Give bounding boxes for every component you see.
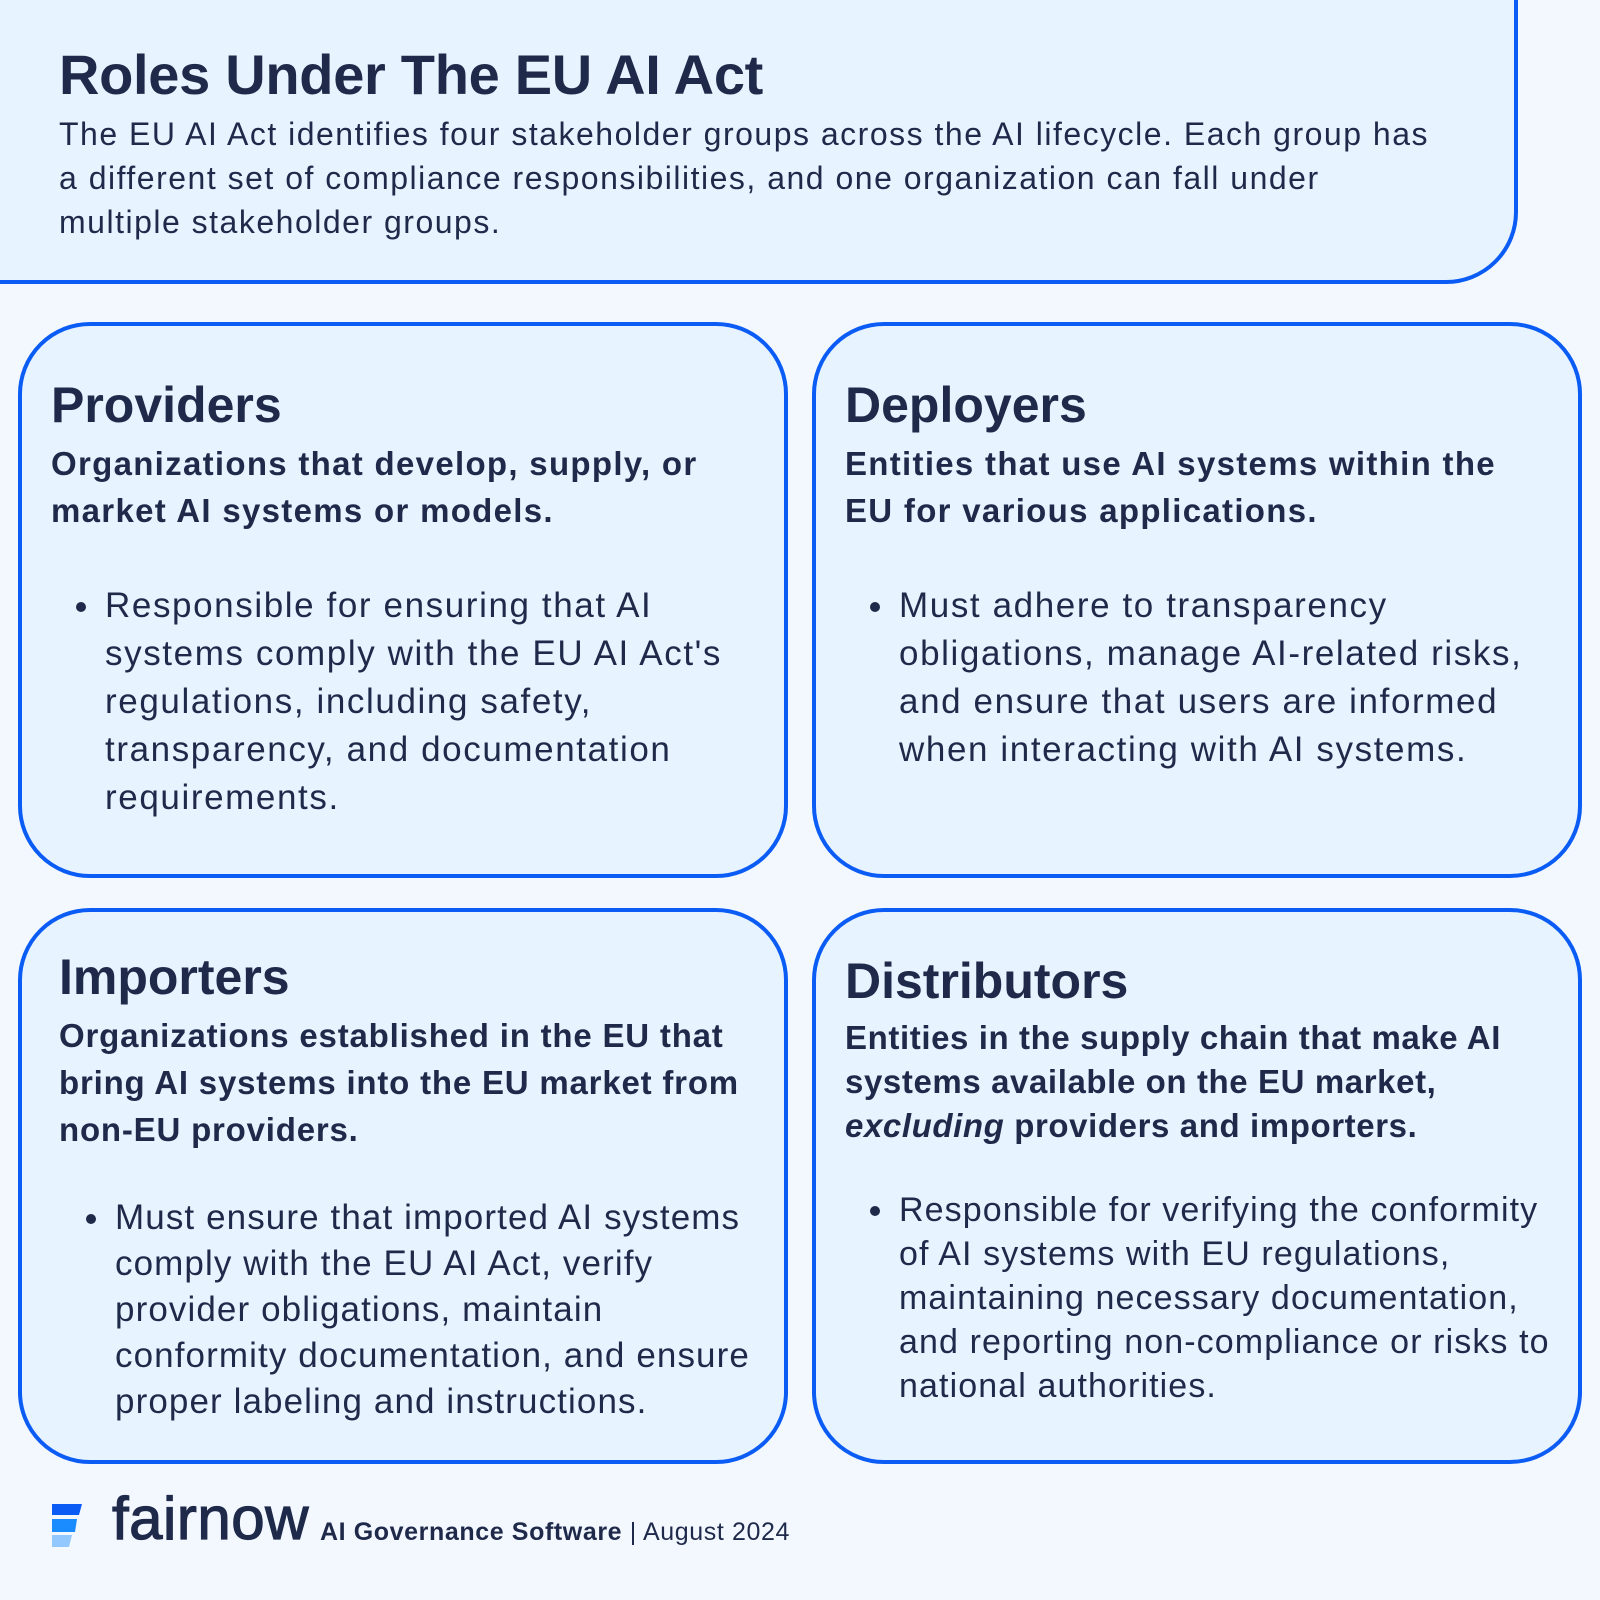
panel: distributors: maintaining necessary documentation, (899, 1279, 1519, 1317)
panel: importers: Must ensure that imported AI systems (115, 1198, 740, 1237)
tagline: AI Governance Software | August 2024 (320, 1518, 790, 1546)
panel: distributors: Entities in the supply chain that make AI (845, 1019, 1501, 1056)
intro text: The EU AI Act identifies four stakeholder groups across the AI lifecycle. Each group has (59, 116, 1429, 152)
panel: importers: conformity documentation, and ensure (115, 1336, 750, 1375)
panel: deployers: when interacting with AI systems. (899, 730, 1467, 769)
panel: deployers (812, 322, 1582, 878)
panel: importers: Importers (59, 949, 290, 1005)
panel: providers: Providers (51, 377, 282, 433)
brand name: fairnow (112, 1485, 309, 1552)
panel: providers: Responsible for ensuring that AI (105, 586, 652, 625)
intro text (59, 116, 1429, 240)
panel: deployers: Must adhere to transparency (899, 586, 1388, 625)
panel: importers: bring AI systems into the EU market from (59, 1064, 739, 1101)
panel: importers: Organizations established in the EU that (59, 1017, 724, 1054)
panel: deployers: Deployers (845, 377, 1087, 433)
header panel (0, 0, 1518, 284)
intro text: a different set of compliance responsibilities, and one organization can fall under (59, 160, 1320, 196)
intro text: multiple stakeholder groups. (59, 204, 501, 240)
title: Roles Under The EU AI Act (59, 43, 763, 106)
panel: deployers: EU for various applications. (845, 492, 1318, 529)
panel: distributors: excluding providers and importers. (845, 1107, 1417, 1144)
panel: importers: comply with the EU AI Act, verify (115, 1244, 653, 1283)
panel: providers: regulations, including safety, (105, 682, 592, 721)
panel: distributors: Responsible for verifying the conformity (899, 1191, 1538, 1229)
panel: providers: systems comply with the EU AI Act's (105, 634, 722, 673)
panel: distributors: and reporting non-compliance or risks to (899, 1323, 1550, 1361)
panel: deployers: Entities that use AI systems within the (845, 445, 1496, 482)
panel: providers: requirements. (105, 778, 340, 817)
panel: importers (18, 908, 788, 1464)
panel: importers: non-EU providers. (59, 1111, 359, 1148)
panel: importers: proper labeling and instructions. (115, 1382, 647, 1421)
panel: importers: provider obligations, maintain (115, 1290, 603, 1329)
panel: distributors: systems available on the EU market, (845, 1063, 1436, 1100)
panel: distributors: national authorities. (899, 1367, 1217, 1405)
icon: fairnow logo (52, 1504, 82, 1547)
panel: distributors: of AI systems with EU regulations, (899, 1235, 1450, 1273)
panel: providers (18, 322, 788, 878)
panel: providers: transparency, and documentation (105, 730, 672, 769)
panel: deployers: and ensure that users are informed (899, 682, 1498, 721)
panel: distributors (812, 908, 1582, 1464)
panel: providers: Organizations that develop, supply, or (51, 445, 698, 482)
footer (52, 1485, 790, 1552)
panel: deployers: obligations, manage AI-related risks, (899, 634, 1522, 673)
panel: distributors: Distributors (845, 953, 1128, 1009)
panel: providers: market AI systems or models. (51, 492, 554, 529)
